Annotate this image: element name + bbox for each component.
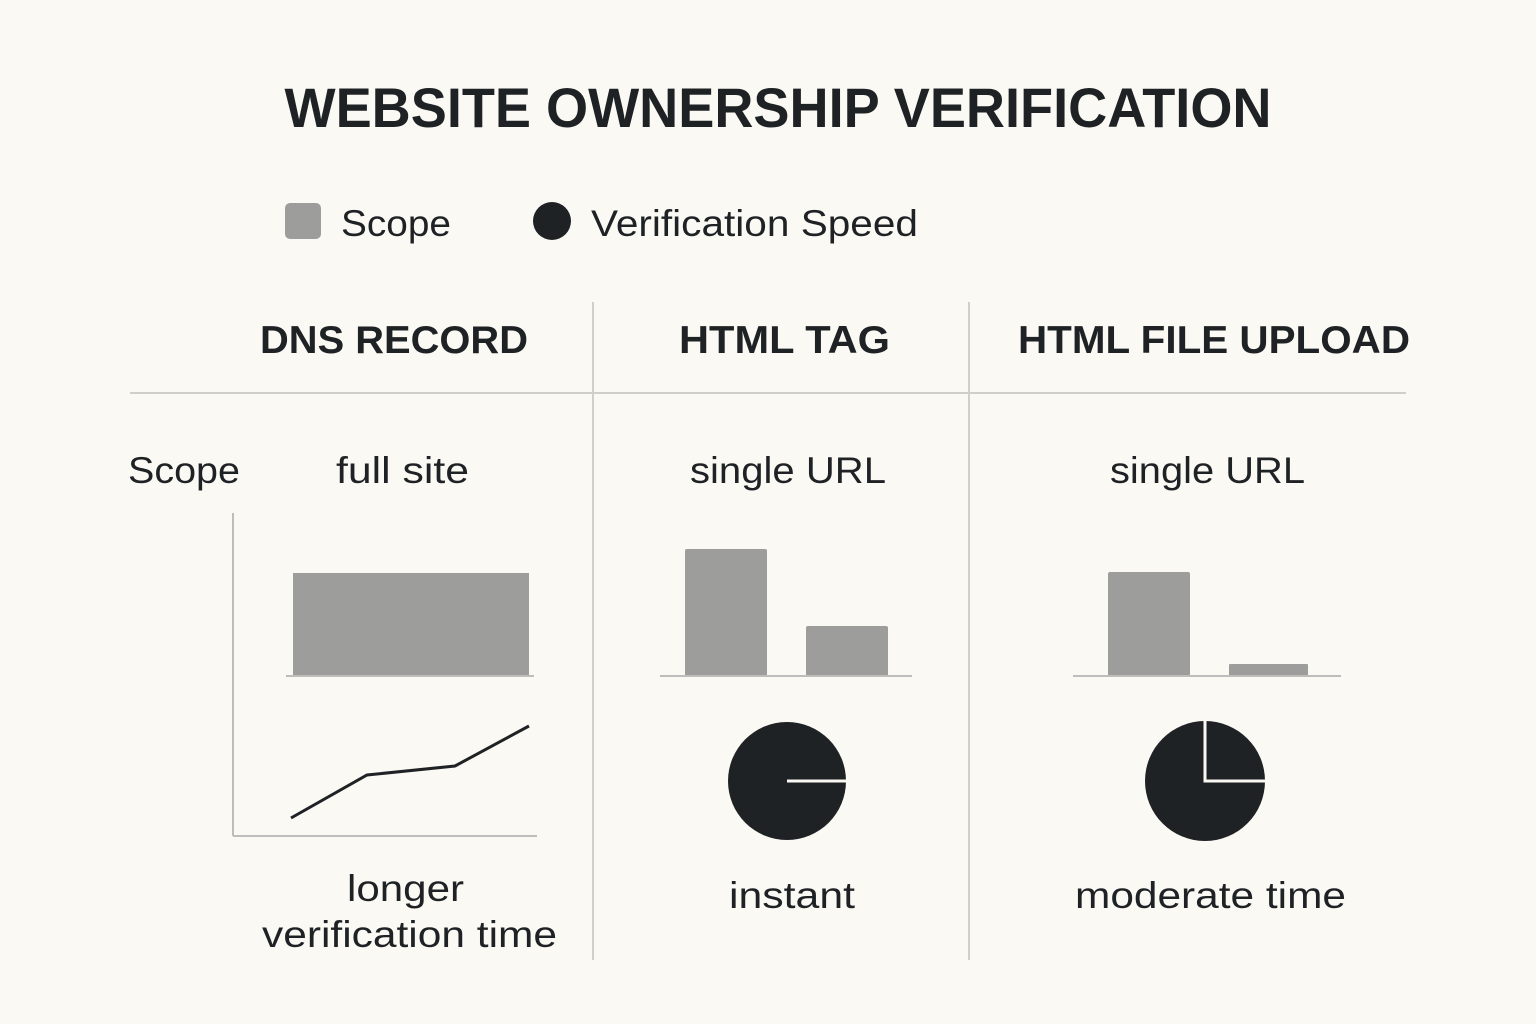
legend: scope swatch — [285, 203, 321, 239]
scope text: single URL: single URL — [1110, 450, 1305, 491]
legend: speed label: Verification Speed — [591, 203, 918, 244]
panel: HTML file upload — [1018, 319, 1410, 916]
scope text: full site: full site — [336, 450, 469, 491]
heading: HTML FILE UPLOAD: HTML FILE UPLOAD — [1018, 319, 1410, 362]
speed text: longer verification time: longer — [347, 868, 464, 909]
chart: DNS scope bar and time line — [233, 513, 537, 836]
bar chart: file upload — [1073, 572, 1341, 676]
speed text: instant: instant — [729, 875, 856, 916]
speed text: longer verification time: verification time — [262, 914, 557, 955]
row label: Scope: Scope — [128, 450, 240, 491]
scope text: single URL: single URL — [690, 450, 886, 491]
heading: DNS RECORD: DNS RECORD — [260, 319, 528, 362]
pie: instant — [728, 722, 846, 840]
heading: HTML TAG: HTML TAG — [679, 319, 890, 362]
legend: scope label: Scope — [341, 203, 451, 244]
panel: HTML tag — [660, 319, 912, 916]
pie: moderate time — [1145, 721, 1265, 841]
title: WEBSITE OWNERSHIP VERIFICATION — [284, 76, 1272, 139]
legend — [285, 202, 918, 244]
panel: DNS record — [128, 319, 557, 955]
legend: speed swatch — [533, 202, 571, 240]
speed text: moderate time: moderate time — [1075, 875, 1346, 916]
bar chart: HTML tag — [660, 549, 912, 676]
